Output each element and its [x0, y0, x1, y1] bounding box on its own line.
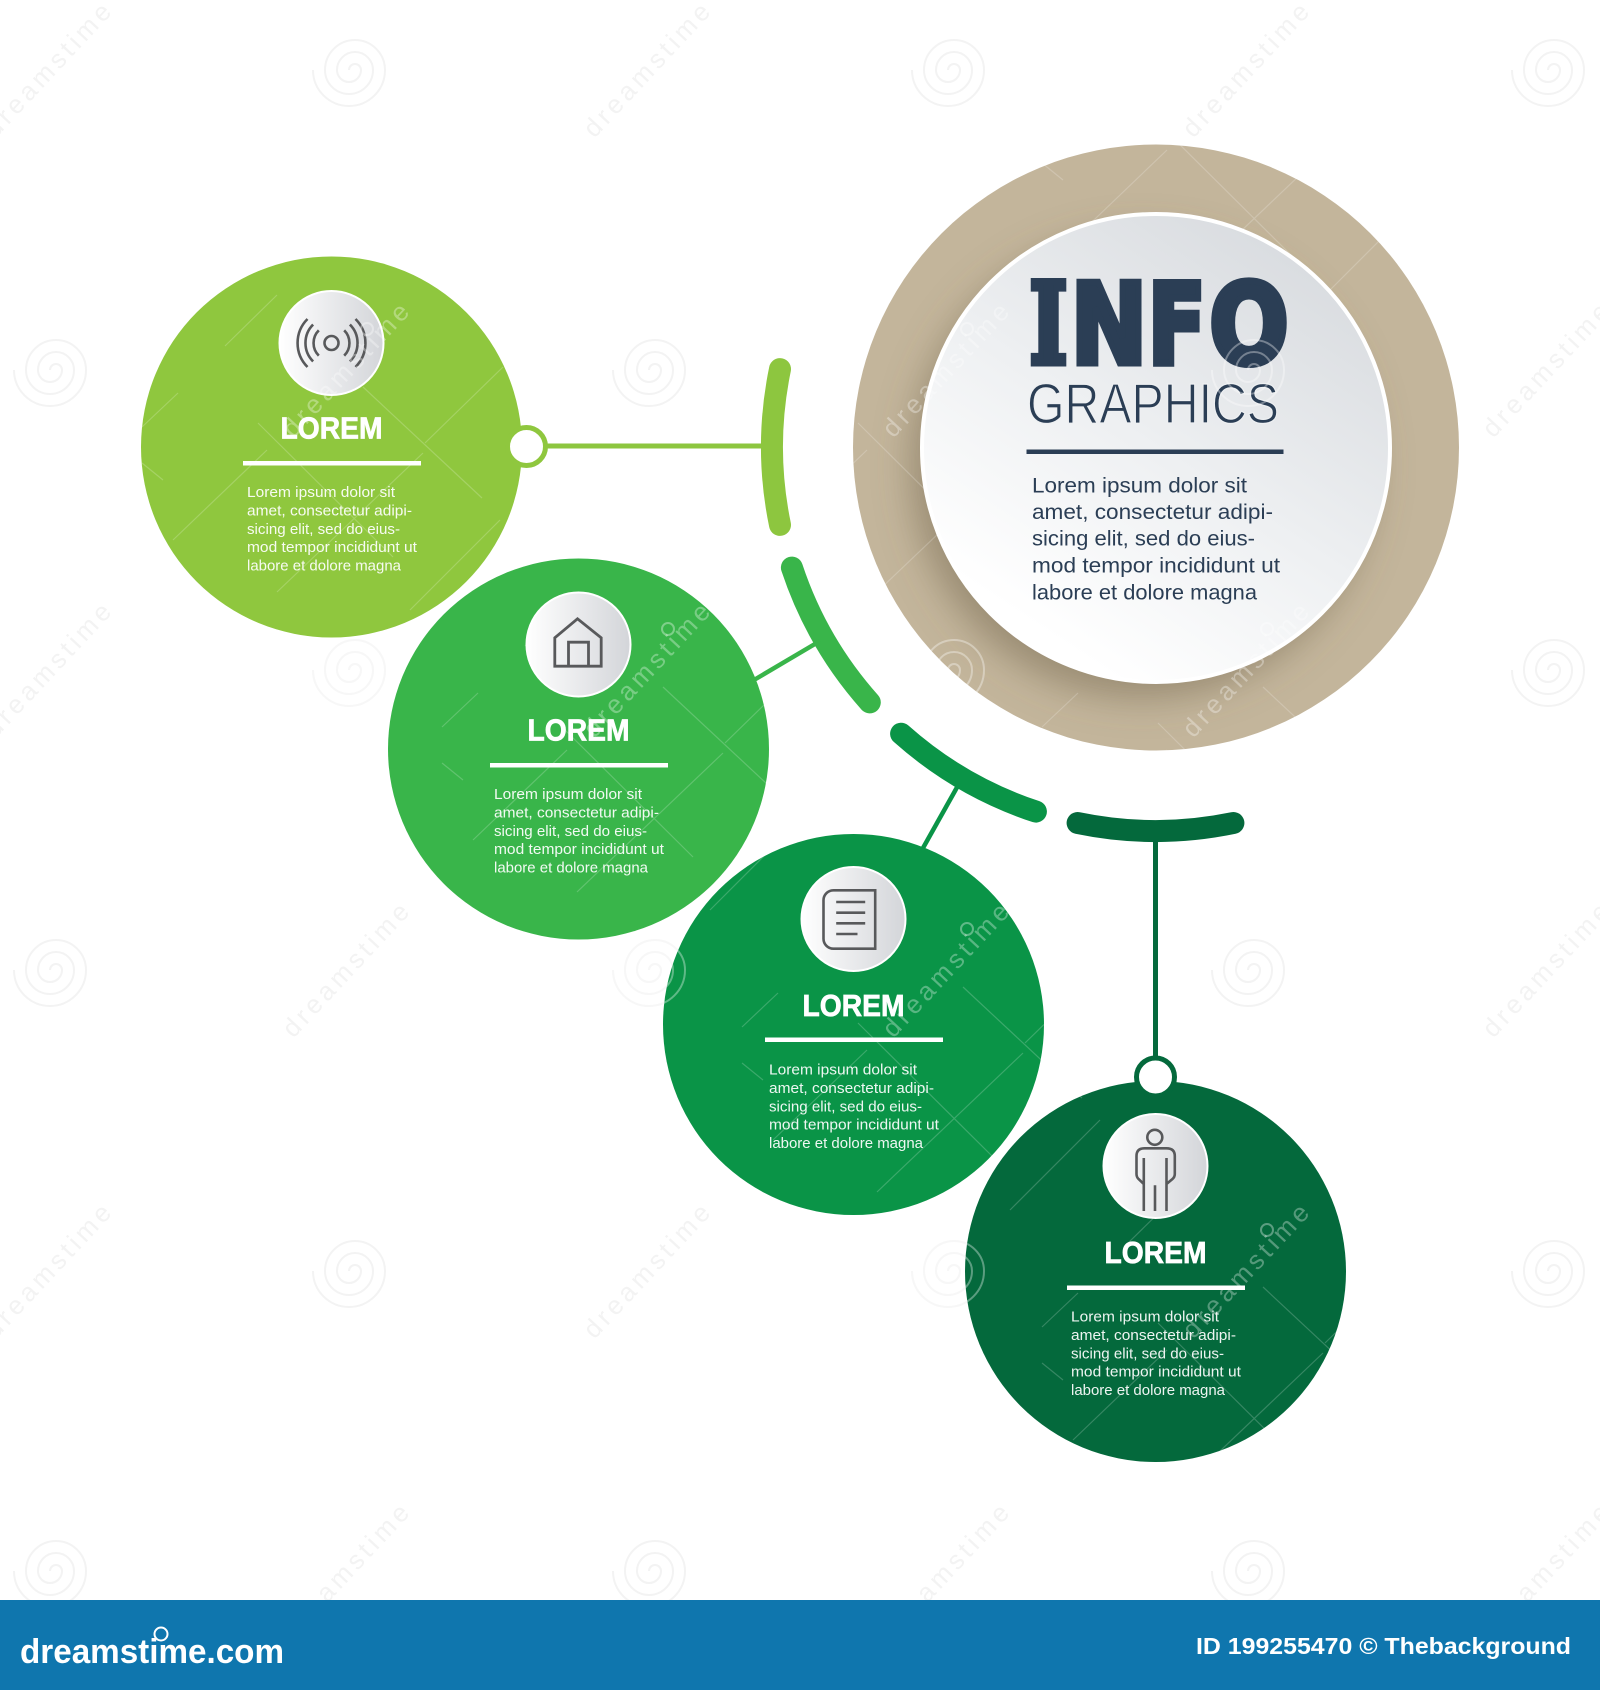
text block: amet, consectetur adipi-	[494, 805, 659, 821]
text block	[1071, 1310, 1241, 1399]
heading: LOREM: LOREM	[802, 988, 904, 1023]
text block: sicing elit, sed do eius-	[1071, 1346, 1224, 1362]
step 4 content	[1067, 1114, 1245, 1399]
divider	[243, 461, 421, 466]
text block	[769, 1062, 939, 1152]
watermark: faint grey background marks: dreamstime	[876, 1498, 1015, 1644]
watermark: faint grey background marks: dreamstime	[1176, 0, 1315, 143]
connector 4	[1153, 835, 1158, 1060]
text block: sicing elit, sed do eius-	[769, 1099, 922, 1115]
connector node: step 4 ring	[1136, 1058, 1174, 1096]
panel: outer tan ring	[853, 144, 1459, 750]
heading: INFO: N	[1071, 261, 1147, 390]
text block: central description	[1032, 474, 1280, 604]
watermark: light marks over shapes: dreamstime	[876, 897, 1015, 1043]
arc segment 2	[792, 568, 870, 702]
arc segment 3	[901, 734, 1036, 812]
heading: INFO: I	[1030, 260, 1068, 390]
panel: step 1 circle	[141, 256, 522, 638]
text block: central description: mod tempor incididunt ut	[1032, 555, 1280, 578]
segmented arc with connectors	[540, 369, 1233, 1060]
heading: INFO	[1030, 260, 1288, 390]
text block	[494, 787, 664, 877]
text block: mod tempor incididunt ut	[1071, 1365, 1241, 1381]
watermark: faint grey background marks: dreamstime	[276, 1498, 415, 1644]
text block: mod tempor incididunt ut	[769, 1118, 939, 1134]
divider	[765, 1038, 943, 1042]
text block: amet, consectetur adipi-	[769, 1081, 934, 1097]
text block: Lorem ipsum dolor sit	[769, 1062, 917, 1078]
panel: step 4 circle	[965, 1081, 1346, 1462]
icon: house	[526, 592, 630, 696]
text block: amet, consectetur adipi-	[1071, 1328, 1236, 1344]
connector node: step 1 ring	[508, 428, 546, 466]
watermark: light marks over shapes: dreamstime	[276, 297, 415, 443]
watermark: light marks over shapes: dreamstime	[876, 297, 1015, 443]
watermark: light marks over shapes: dreamstime	[1176, 1198, 1315, 1344]
step 3 content	[765, 867, 943, 1152]
text block: labore et dolore magna	[247, 559, 402, 575]
watermark: faint grey background marks: dreamstime	[577, 1198, 716, 1344]
text block: labore et dolore magna	[1071, 1383, 1226, 1399]
heading: LOREM: LOREM	[528, 712, 630, 748]
footer bar	[0, 1600, 1600, 1690]
panel: step 3 circle	[663, 834, 1044, 1215]
heading: INFO: O	[1210, 261, 1288, 390]
text block: labore et dolore magna	[494, 861, 649, 877]
heading: GRAPHICS: GRAPHICS	[1027, 372, 1279, 436]
divider	[1067, 1286, 1245, 1290]
text block: sicing elit, sed do eius-	[247, 522, 400, 538]
text block: labore et dolore magna	[769, 1136, 924, 1152]
heading: LOREM: LOREM	[1104, 1235, 1206, 1270]
text block: Lorem ipsum dolor sit	[1071, 1310, 1219, 1326]
icon: document	[802, 867, 906, 971]
text block: central description: labore et dolore magna	[1032, 581, 1257, 604]
text block: mod tempor incididunt ut	[494, 842, 664, 858]
panel: central white disc	[922, 214, 1390, 682]
text block: Lorem ipsum dolor sit	[247, 485, 395, 501]
watermark: faint grey background marks: dreamstime	[577, 0, 716, 143]
text block: central description: amet, consectetur adipi-	[1032, 501, 1273, 524]
watermark: faint diagonal lattice lines	[142, 146, 1392, 1451]
watermark: light marks over shapes: dreamstime	[1176, 597, 1315, 743]
panel: step 2 circle	[388, 558, 769, 940]
arc segment 1	[772, 369, 780, 525]
divider	[490, 763, 668, 768]
text block: Lorem ipsum dolor sit	[494, 787, 642, 803]
watermark: light marks over shapes: dreamstime	[577, 597, 716, 743]
text block: amet, consectetur adipi-	[247, 503, 412, 519]
text block	[247, 485, 417, 575]
text block: sicing elit, sed do eius-	[494, 824, 647, 840]
footer logo: dreamstime.com	[20, 1633, 284, 1671]
icon: person	[1104, 1114, 1208, 1218]
heading: LOREM: LOREM	[280, 410, 382, 446]
footer credit: ID 199255470 © Thebackground	[1196, 1633, 1571, 1659]
heading: INFO: F	[1148, 261, 1206, 390]
step 1 content	[243, 291, 421, 575]
watermark: light marks over shapes	[276, 297, 1315, 1344]
text block: central description: Lorem ipsum dolor sit	[1032, 474, 1247, 498]
connector 1	[540, 444, 770, 448]
connector 2	[754, 641, 820, 680]
step 2 content	[490, 592, 668, 877]
text block: central description: sicing elit, sed do eius-	[1032, 528, 1255, 551]
arc segment 4	[1078, 823, 1233, 831]
watermark: faint grey background marks: dreamstime	[276, 897, 415, 1043]
divider: title rule	[1026, 450, 1284, 454]
text block: mod tempor incididunt ut	[247, 540, 417, 556]
icon: signal	[280, 291, 384, 395]
connector 3	[923, 782, 960, 848]
